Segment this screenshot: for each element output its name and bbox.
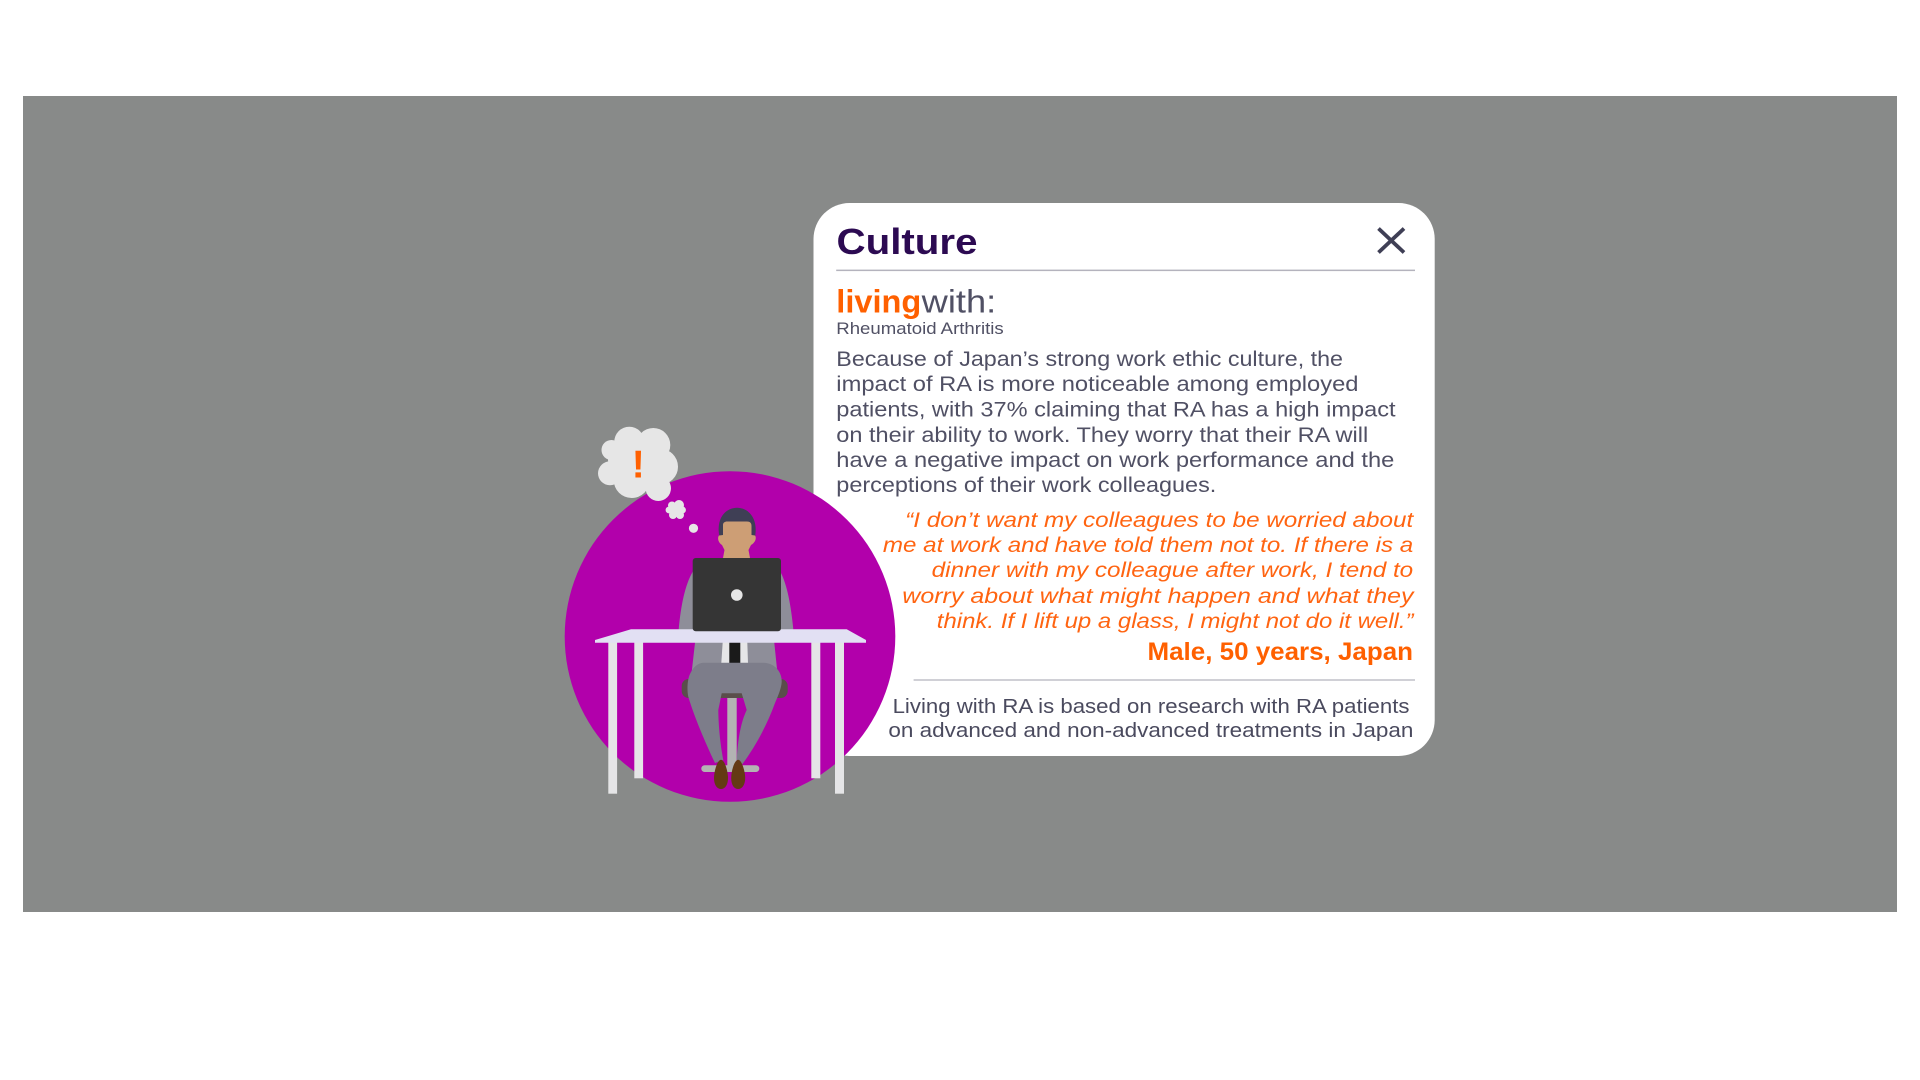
patient quote	[883, 508, 1415, 633]
body paragraph: Because of Japan’s strong work ethic culture, the	[836, 347, 1343, 371]
laptop logo	[731, 589, 743, 601]
title: Culture	[836, 221, 978, 262]
right shoe	[731, 760, 745, 789]
footnote: on advanced and non-advanced treatments in Japan	[888, 719, 1413, 742]
thought cloud	[598, 427, 698, 533]
shirt	[721, 642, 748, 663]
chair base	[701, 765, 759, 772]
footnote: Living with RA is based on research with RA patients	[893, 695, 1410, 718]
patient quote: dinner with my colleague after work, I tend to	[932, 558, 1413, 582]
tiny thought puff	[689, 524, 698, 533]
body paragraph: patients, with 37% claiming that RA has a high impact	[836, 398, 1396, 422]
word: with: with:	[921, 284, 996, 320]
word: living: living	[836, 284, 921, 320]
patient quote: worry about what might happen and what they	[902, 584, 1415, 608]
panel: culture card	[814, 203, 1435, 756]
chair pole	[727, 698, 737, 770]
laptop	[693, 558, 781, 631]
illustration: person working at desk	[565, 427, 895, 802]
footnote	[888, 695, 1413, 742]
desk legs	[608, 642, 844, 794]
desk top	[595, 629, 866, 643]
icon: exclamation mark: !	[632, 444, 645, 486]
body paragraph: impact of RA is more noticeable among employed	[836, 372, 1358, 396]
face and neck with ears	[718, 522, 756, 558]
body paragraph: on their ability to work. They worry that their RA will	[836, 423, 1368, 447]
jacket	[679, 572, 793, 672]
brand heading: living with	[836, 284, 996, 320]
tie	[729, 642, 740, 663]
hair	[719, 508, 756, 537]
desk	[595, 629, 866, 794]
patient quote: “I don’t want my colleagues to be worried about	[905, 508, 1414, 532]
quote attribution: Male, 50 years, Japan	[1148, 638, 1413, 666]
subheading: condition name: Rheumatoid Arthritis	[836, 320, 1004, 338]
grey overlay background	[23, 96, 1897, 912]
card background	[814, 203, 1435, 756]
left shoe	[714, 760, 728, 789]
icon: close button	[1378, 228, 1404, 252]
patient quote: think. If I lift up a glass, I might not do it well.”	[937, 609, 1414, 633]
small thought puff	[666, 500, 686, 519]
head	[718, 508, 756, 558]
patient quote: me at work and have told them not to. If there is a	[883, 533, 1413, 557]
body paragraph: perceptions of their work colleagues.	[836, 473, 1216, 497]
trousers	[687, 663, 782, 765]
body paragraph: have a negative impact on work performance and the	[836, 448, 1394, 472]
person and chair	[679, 508, 793, 789]
magenta circle	[565, 471, 895, 802]
body paragraph	[836, 347, 1396, 497]
chair seat	[682, 679, 788, 698]
